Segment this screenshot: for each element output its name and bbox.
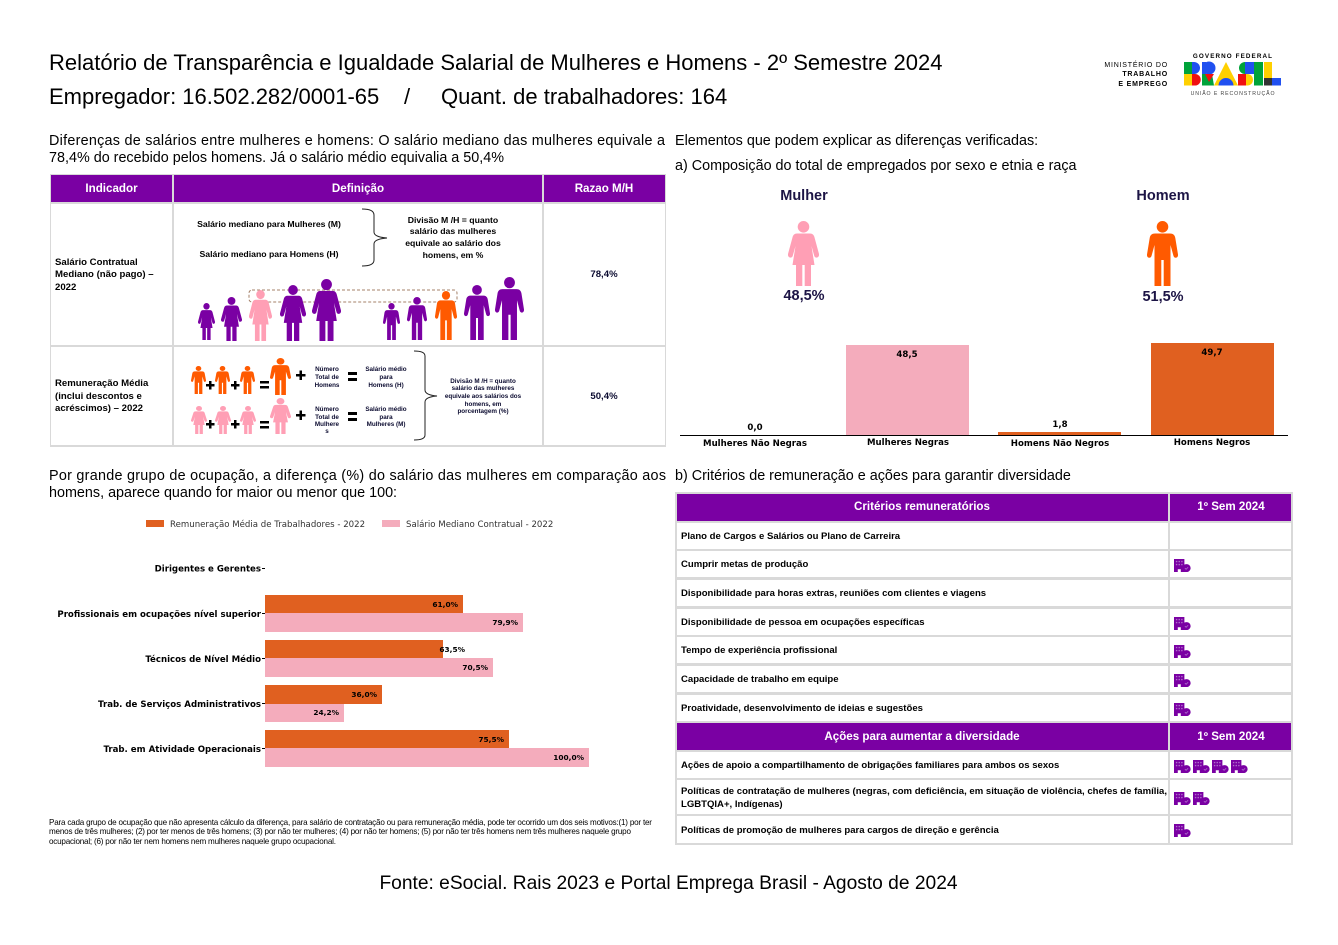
bar chart: ethnicity: Homens Não Negros	[1011, 439, 1109, 449]
bar chart: occupation: Trab. em Atividade Operacionais	[103, 745, 261, 755]
table: criteria: Políticas de promoção de mulheres para cargos de direção e gerência	[681, 825, 1000, 836]
bar chart: ethnicity: 1,8	[1052, 420, 1068, 430]
footnote: ocupacional; (6) por não ter nem homens nem mulheres naquele grupo ocupacional.	[49, 837, 336, 846]
sex composition: Homem	[1136, 188, 1190, 204]
intro paragraph left	[49, 133, 665, 166]
average formula labels: Número	[315, 406, 339, 413]
average formula labels: para	[379, 374, 393, 381]
bar chart: occupation: 75,5%	[478, 735, 505, 744]
intro paragraph left: Diferenças de salários entre mulheres e homens: O salário mediano das mulheres equivale a	[49, 133, 665, 149]
table: criteria: Plano de Cargos e Salários ou Plano de Carreira	[681, 531, 901, 542]
median definition text: homens, em %	[423, 250, 484, 260]
sex composition	[780, 188, 1190, 305]
occupation paragraph: Por grande grupo de ocupação, a diferença (%) do salário das mulheres em comparação aos	[49, 468, 666, 484]
median definition text: salário das mulheres	[410, 226, 496, 236]
bar chart: occupation: Dirigentes e Gerentes	[155, 564, 261, 574]
median people icons	[198, 277, 524, 341]
footnote	[49, 818, 652, 846]
bar chart: occupation: 100,0%	[553, 753, 585, 762]
table: indicators: 50,4%	[590, 391, 618, 402]
government logo: GOVERNO FEDERAL	[1193, 53, 1273, 60]
subheading b: b) Critérios de remuneração e ações para garantir diversidade	[675, 468, 1071, 484]
table: criteria: Capacidade de trabalho em equipe	[681, 674, 839, 685]
average formula labels	[315, 366, 522, 435]
bar chart: ethnicity: Mulheres Não Negras	[703, 439, 807, 449]
intro paragraph left: 78,4% do recebido pelos homens. Já o salário médio equivalia a 50,4%	[49, 150, 504, 166]
table: criteria: Disponibilidade de pessoa em ocupações específicas	[681, 617, 925, 628]
bar chart: ethnicity: 48,5	[896, 350, 918, 360]
sex composition: 51,5%	[1142, 289, 1184, 305]
table: indicators: Remuneração Média	[55, 378, 149, 389]
table: indicators	[50, 174, 666, 447]
bar chart: occupation: 70,5%	[462, 663, 489, 672]
footnote: menos de três mulheres; (2) por ter menos de três homens; (3) por não ter mulheres; (4) por não ter homens; (5) por não ter três homens nem três mulheres naquele grupo	[49, 827, 631, 836]
sex composition: Mulher	[780, 188, 828, 204]
average formula labels: Salário médio	[365, 366, 407, 373]
bar chart: occupation	[57, 564, 589, 767]
table: indicators: Definição	[332, 182, 384, 195]
table: criteria: 1º Sem 2024	[1197, 500, 1265, 513]
government logo: UNIÃO E RECONSTRUÇÃO	[1191, 90, 1275, 97]
bar chart: ethnicity: Homens Negros	[1174, 438, 1250, 448]
average formula labels: homens, em	[465, 401, 502, 408]
right section heading: a) Composição do total de empregados por sexo e etnia e raça	[675, 158, 1077, 174]
median definition text: Salário mediano para Mulheres (M)	[197, 219, 341, 229]
government logo	[1184, 53, 1281, 97]
bar chart: occupation: 24,2%	[313, 708, 340, 717]
bar chart: ethnicity: 0,0	[747, 423, 763, 433]
bar chart: occupation: Trab. de Serviços Administrativos	[98, 700, 261, 710]
median definition text: Salário mediano para Homens (H)	[199, 249, 339, 259]
average formula labels: porcentagem (%)	[457, 408, 509, 415]
average formula labels: para	[379, 414, 393, 421]
bracket	[362, 209, 387, 266]
table: criteria: Ações de apoio a compartilhamento de obrigações familiares para ambos os sexos	[681, 760, 1059, 771]
title: Empregador: 16.502.282/0001-65	[49, 84, 379, 109]
table: criteria: Proatividade, desenvolvimento de ideias e sugestões	[681, 703, 923, 714]
legend: Salário Mediano Contratual - 2022	[406, 520, 553, 530]
icons: company checks	[1174, 559, 1248, 837]
table: criteria: Políticas de contratação de mulheres (negras, com deficiência, em situação de violência, chefes de família,	[681, 786, 1167, 797]
bracket	[414, 351, 437, 440]
average formula labels: Número	[315, 366, 339, 373]
table: criteria: 1º Sem 2024	[1197, 730, 1265, 743]
ministry logo text: MINISTÉRIO DO	[1104, 60, 1168, 69]
title: Quant. de trabalhadores: 164	[441, 84, 727, 109]
average formula labels: Homens	[315, 382, 340, 389]
table: indicators: Indicador	[85, 182, 138, 195]
bar chart: occupation: 63,5%	[439, 645, 466, 654]
occupation paragraph: homens, aparece quando for maior ou menor que 100:	[49, 485, 397, 501]
table: indicators: Salário Contratual	[55, 257, 138, 268]
average formula labels: Divisão M /H = quanto	[450, 378, 516, 385]
average formula labels: Homens (H)	[368, 382, 404, 389]
average formula labels: Mulhere	[315, 421, 340, 428]
right section heading	[675, 133, 1077, 174]
table: indicators: 2022	[55, 282, 76, 293]
median definition text: equivale ao salário dos	[405, 238, 501, 248]
bar chart: occupation: Técnicos de Nível Médio	[145, 654, 261, 665]
ministry logo text: TRABALHO	[1122, 71, 1168, 78]
ministry logo text	[1104, 60, 1168, 88]
source: Fonte: eSocial. Rais 2023 e Portal Emprega Brasil - Agosto de 2024	[379, 873, 958, 894]
average formula labels: equivale aos salários dos	[445, 393, 522, 400]
footnote: Para cada grupo de ocupação que não apresenta cálculo da diferença, para salário de contratação ou para remuneração média, pode ter ocorrido um dos seis motivos:(1) por ter	[49, 818, 652, 827]
average formula labels: Salário médio	[365, 406, 407, 413]
average formula labels: Total de	[315, 374, 339, 381]
title: /	[404, 84, 411, 109]
table: criteria: Disponibilidade para horas extras, reuniões com clientes e viagens	[681, 588, 986, 599]
table: criteria: Critérios remuneratórios	[854, 500, 990, 513]
ministry logo text: E EMPREGO	[1118, 81, 1168, 88]
legend	[146, 519, 553, 530]
table: indicators: Mediano (não pago) –	[55, 269, 154, 280]
average formula labels: s	[325, 428, 329, 435]
title: Relatório de Transparência e Igualdade Salarial de Mulheres e Homens - 2º Semestre 2024	[49, 50, 942, 75]
table: criteria: Ações para aumentar a diversidade	[824, 730, 1020, 743]
title	[49, 50, 942, 109]
sex composition: 48,5%	[783, 288, 825, 304]
table: indicators: acréscimos) – 2022	[55, 403, 143, 414]
table: criteria: LGBTQIA+, Indígenas)	[681, 799, 783, 810]
bar chart: occupation: 36,0%	[351, 690, 378, 699]
bar chart: ethnicity	[680, 343, 1288, 449]
median definition text	[197, 215, 501, 260]
median definition text: Divisão M /H = quanto	[408, 215, 498, 225]
table: criteria: Cumprir metas de produção	[681, 559, 808, 570]
average formula labels: salário das mulheres	[452, 385, 515, 392]
right section heading: Elementos que podem explicar as diferenças verificadas:	[675, 133, 1038, 149]
table: criteria: Tempo de experiência profissional	[681, 645, 837, 656]
average formula labels: Mulheres (M)	[367, 421, 405, 428]
legend: Remuneração Média de Trabalhadores - 2022	[170, 519, 365, 530]
bar chart: occupation: 79,9%	[492, 618, 519, 627]
table: indicators: (inclui descontos e	[55, 391, 142, 402]
average formula icons	[191, 358, 357, 434]
average formula labels: Total de	[315, 414, 339, 421]
table: criteria	[675, 492, 1293, 845]
table: indicators: Razao M/H	[575, 182, 633, 195]
bar chart: ethnicity: Mulheres Negras	[867, 438, 949, 448]
occupation paragraph	[49, 468, 666, 501]
table: indicators: 78,4%	[590, 269, 618, 280]
bar chart: ethnicity: 49,7	[1201, 348, 1223, 358]
bar chart: occupation: Profissionais em ocupações nível superior	[57, 610, 262, 620]
bar chart: occupation: 61,0%	[432, 600, 459, 609]
dashed median highlight	[249, 290, 457, 302]
